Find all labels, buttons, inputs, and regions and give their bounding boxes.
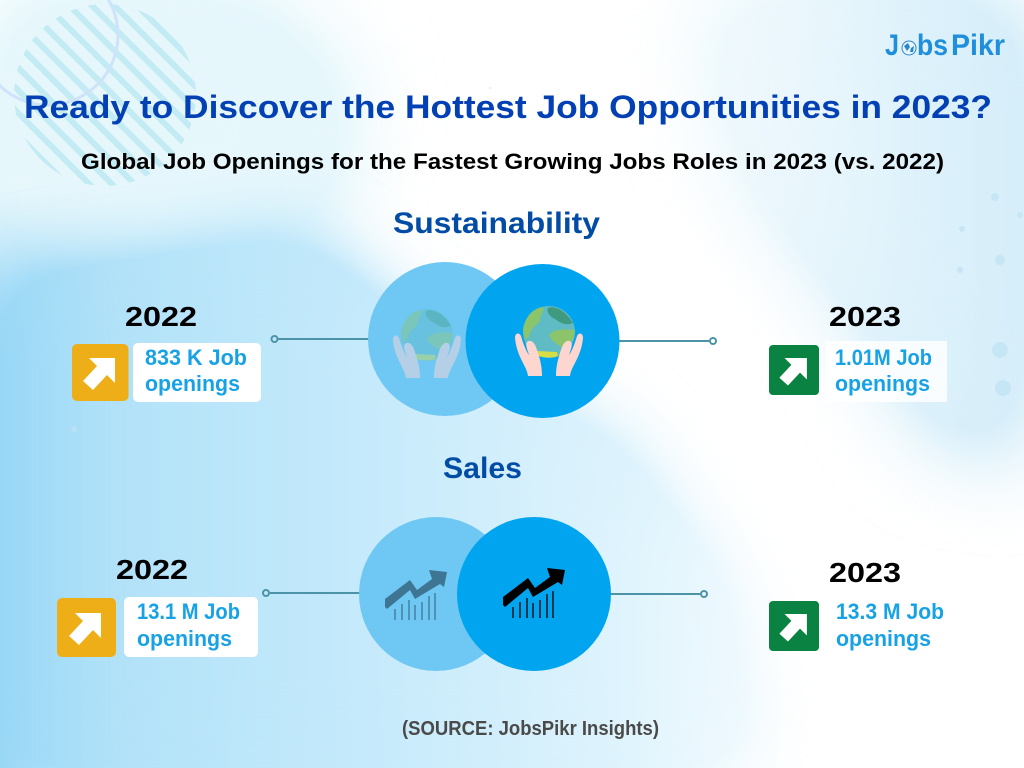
label: 833 K Job openings bbox=[133, 343, 261, 402]
year: 2022: 2022 bbox=[125, 301, 197, 332]
connector: 2022 sustainability bbox=[272, 336, 370, 342]
icon: green up arrow bbox=[769, 601, 819, 651]
circle: sustainability 2023 bbox=[466, 264, 620, 418]
label: 1.01M Job openings: 1.01M Job bbox=[835, 345, 932, 370]
label: 13.1 M Job openings: 13.1 M Job bbox=[137, 599, 240, 624]
label: 1.01M Job openings: openings bbox=[835, 371, 930, 396]
circle: sales 2023 bbox=[457, 517, 611, 671]
logo: JobsPikr bbox=[885, 29, 1005, 62]
label: 13.3 M Job openings bbox=[836, 599, 944, 651]
icon: green up arrow bbox=[769, 345, 819, 395]
connector: 2023 sales bbox=[608, 591, 707, 597]
label: 833 K Job openings: openings bbox=[145, 371, 240, 396]
icon: yellow up arrow bbox=[72, 344, 128, 401]
label: 13.1 M Job openings: openings bbox=[137, 626, 232, 651]
logo: JobsPikr: Pikr bbox=[951, 29, 1005, 62]
source note: (SOURCE: JobsPikr Insights) bbox=[402, 718, 659, 740]
decorative striped circle bbox=[14, 4, 196, 186]
icon: yellow up arrow bbox=[57, 598, 116, 657]
year: 2023: 2023 bbox=[829, 557, 901, 588]
heading: Sales: Sales bbox=[443, 452, 522, 485]
logo: JobsPikr: bs bbox=[917, 29, 948, 62]
label: 13.1 M Job openings bbox=[124, 597, 258, 657]
circle: sales 2022 bbox=[359, 517, 513, 671]
label: 13.3 M Job openings: openings bbox=[836, 626, 931, 651]
title: Ready to Discover the Hottest Job Opportunities in 2023? bbox=[24, 89, 992, 125]
logo: JobsPikr: J bbox=[885, 29, 899, 62]
decorative ring bbox=[0, 0, 118, 105]
subtitle: Global Job Openings for the Fastest Growing Jobs Roles in 2023 (vs. 2022) bbox=[81, 149, 944, 174]
circle: sustainability 2022 bbox=[368, 262, 522, 416]
label: 13.3 M Job openings: 13.3 M Job bbox=[836, 599, 944, 624]
year: 2023: 2023 bbox=[829, 301, 901, 332]
label: 1.01M Job openings bbox=[826, 341, 947, 402]
heading: Sustainability: Sustainability bbox=[393, 207, 600, 240]
connector: 2022 sales bbox=[263, 590, 362, 596]
year: 2022: 2022 bbox=[116, 554, 188, 585]
connector: 2023 sustainability bbox=[618, 338, 716, 344]
label: 833 K Job openings: 833 K Job bbox=[145, 345, 247, 370]
